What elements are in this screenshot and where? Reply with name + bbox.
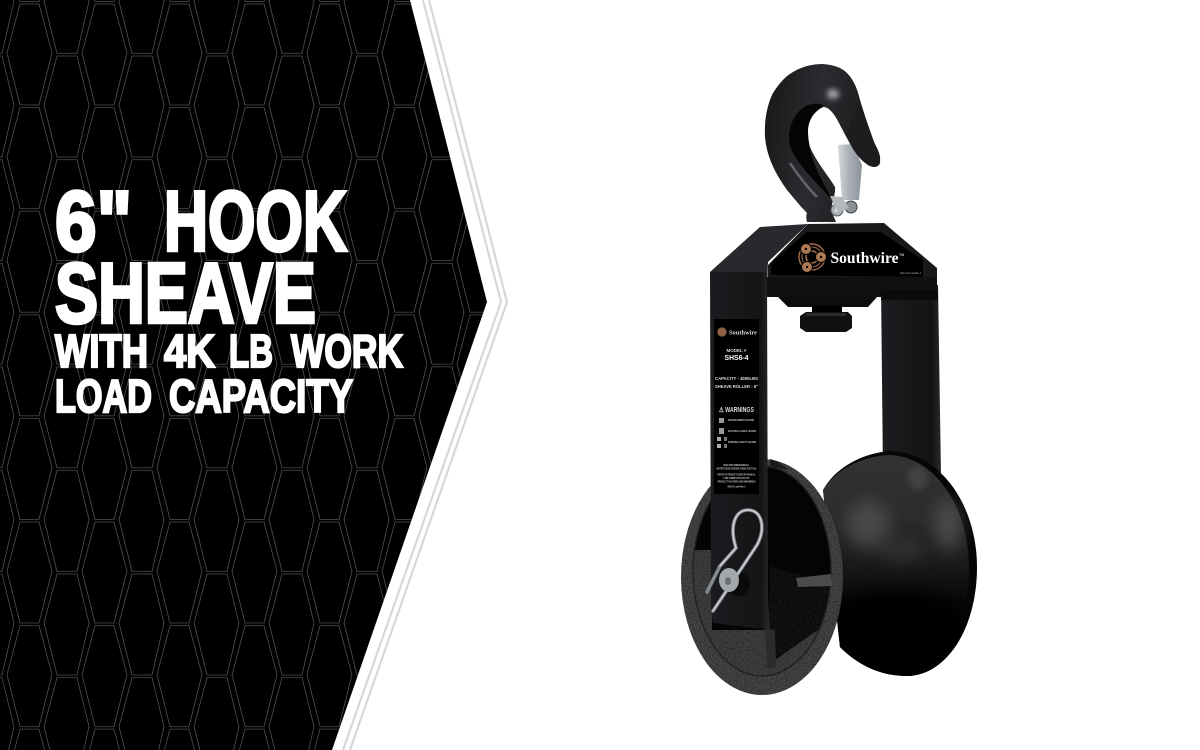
title line: 6 inch hook xyxy=(55,174,347,270)
model text xyxy=(715,348,758,414)
brand name: Southwire xyxy=(830,250,899,267)
model text: MODEL # xyxy=(726,348,747,353)
subtitle line: work load: LB xyxy=(229,325,273,377)
fine print: SHS6-4 Label Rev. 0 xyxy=(728,484,746,488)
warning rows: ENTANGLEMENT HAZARD xyxy=(728,418,754,422)
warning rows: ELECTRICAL SHOCK HAZARD xyxy=(728,429,756,433)
subtitle line: capacity: CAPACITY xyxy=(169,370,353,422)
subtitle line: capacity xyxy=(55,370,353,422)
lower highlight xyxy=(790,163,817,197)
small logo xyxy=(717,327,727,337)
subtitle line: capacity: LOAD xyxy=(55,370,152,422)
hook highlight xyxy=(827,89,839,99)
copper logo xyxy=(799,243,827,273)
dark textured web xyxy=(768,566,832,660)
front flange xyxy=(681,459,843,700)
model text: CAPACITY - 4000LBS xyxy=(715,376,758,381)
model text: SHEAVE ROLLER - 6" xyxy=(715,384,758,389)
side label xyxy=(714,319,759,494)
model text: ⚠ WARNINGS xyxy=(719,406,754,414)
small brand: Southwire xyxy=(729,330,757,336)
right bracket leg xyxy=(881,285,941,475)
fine print: PRODUCT HAZARDS AND WARNINGS xyxy=(718,480,756,484)
trademark: TM xyxy=(899,253,904,257)
fine print: READ AND UNDERSTAND ALL xyxy=(724,463,750,467)
label code: SHS-4 Front Label Rev. 0 xyxy=(900,271,921,275)
top label xyxy=(771,232,923,277)
chamfer side xyxy=(710,224,808,282)
bolt and washer xyxy=(778,297,877,332)
cotter pin xyxy=(707,510,762,611)
outer top edge xyxy=(770,459,788,470)
panel: black hexagon-pattern arrow xyxy=(0,0,487,750)
rim xyxy=(681,459,843,695)
latch xyxy=(830,144,862,216)
fine print xyxy=(716,463,757,488)
title xyxy=(55,174,403,422)
strap shadow band xyxy=(767,277,937,297)
hook tip xyxy=(846,100,880,167)
inner lip xyxy=(693,466,831,676)
title line: 6 inch hook: HOOK xyxy=(164,174,347,270)
back flange and hub xyxy=(823,451,977,676)
chevron outline xyxy=(343,0,507,750)
warning rows: PERSONAL SAFETY HAZARD xyxy=(728,440,756,444)
hook body xyxy=(765,64,880,222)
subtitle line: work load xyxy=(55,325,403,377)
hook xyxy=(765,64,880,222)
left bracket leg and top strap xyxy=(710,223,938,630)
warning rows xyxy=(717,418,756,448)
lower floor xyxy=(694,550,818,676)
inner opening xyxy=(693,466,831,676)
title line: sheave: SHEAVE xyxy=(55,246,316,342)
subtitle line: work load: WITH xyxy=(55,325,148,377)
subtitle line: work load: 4K xyxy=(164,325,215,377)
subtitle line: work load: WORK xyxy=(291,325,403,377)
top strap front xyxy=(767,223,937,297)
title line: 6 inch hook: 6" xyxy=(55,174,132,270)
fine print: INSTRUCTIONS BEFORE USING THIS TOOL xyxy=(716,466,757,470)
inner channel shadow xyxy=(789,104,832,200)
product photo: hook sheave xyxy=(681,64,977,700)
model text: SHS6-4 xyxy=(724,355,749,362)
left leg xyxy=(710,272,770,630)
right leg top edge xyxy=(881,290,938,300)
vertical web xyxy=(765,628,776,668)
fine print: FOR COMPLETE LIST OF xyxy=(724,476,750,480)
fine print: REFER TO PRODUCT SHEEVE'S MANUAL xyxy=(718,472,756,476)
spoke xyxy=(796,574,832,587)
